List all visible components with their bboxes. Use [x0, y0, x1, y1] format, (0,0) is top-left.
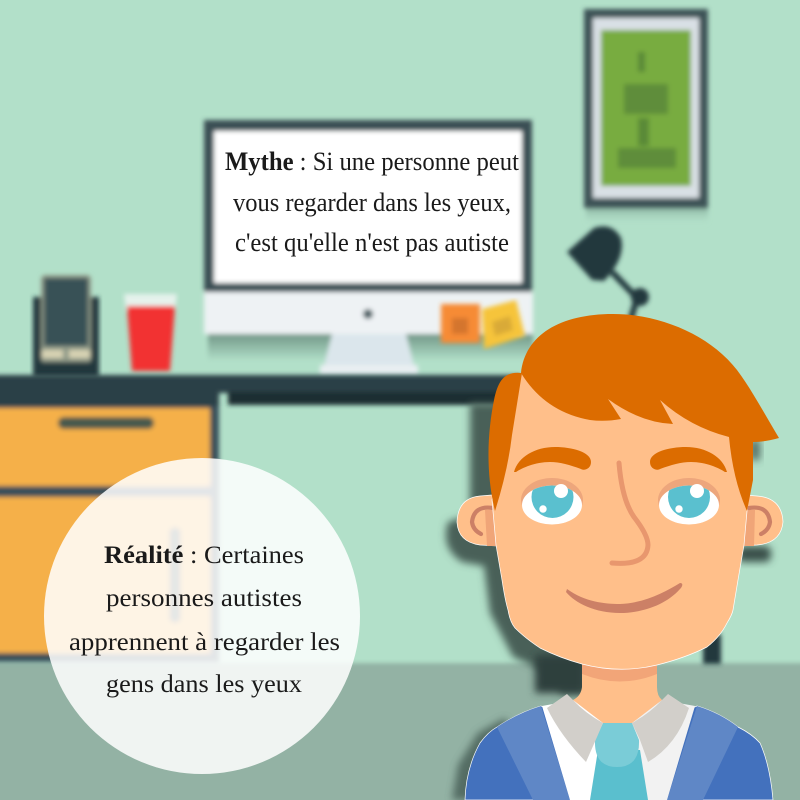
right eyebrow: [650, 447, 727, 472]
mythe text on screen: vous regarder dans les yeux,: [233, 188, 511, 217]
left ear: [457, 495, 498, 546]
réalité text: apprennent à regarder les: [69, 629, 340, 656]
desktop computer: [204, 120, 533, 375]
framed poster: [584, 9, 708, 225]
desk with drawers: [0, 375, 721, 664]
mythe text on screen: c'est qu'elle n'est pas autiste: [235, 228, 509, 257]
jacket: [465, 706, 773, 800]
neck: [573, 660, 662, 723]
mythe text on screen: [225, 147, 520, 257]
left eye: [521, 476, 583, 524]
réalité circle callout: [44, 458, 360, 774]
phone on dock: [33, 275, 99, 377]
hair: [488, 314, 779, 511]
réalité text: Réalité : Certaines: [104, 542, 304, 569]
tie: [590, 723, 648, 800]
left eyebrow: [514, 447, 591, 472]
shirt: [542, 700, 695, 800]
translucent circle: [44, 458, 360, 774]
nose: [612, 463, 648, 563]
mythe text on screen: Mythe : Si une personne peut: [225, 147, 520, 176]
right ear: [740, 495, 783, 546]
sticky notes: [441, 300, 525, 349]
réalité text: gens dans les yeux: [106, 671, 303, 698]
lapels: [497, 706, 570, 800]
réalité text: [69, 542, 340, 698]
réalité text: personnes autistes: [106, 585, 302, 612]
face: [492, 340, 748, 669]
collar: [547, 694, 689, 762]
shadow behind character: [446, 403, 771, 800]
cartoon man: [457, 314, 783, 800]
desk lamp: [567, 226, 649, 322]
right eye: [658, 476, 720, 524]
red cup: [124, 294, 177, 371]
floor: [0, 663, 800, 800]
smile: [566, 583, 682, 613]
